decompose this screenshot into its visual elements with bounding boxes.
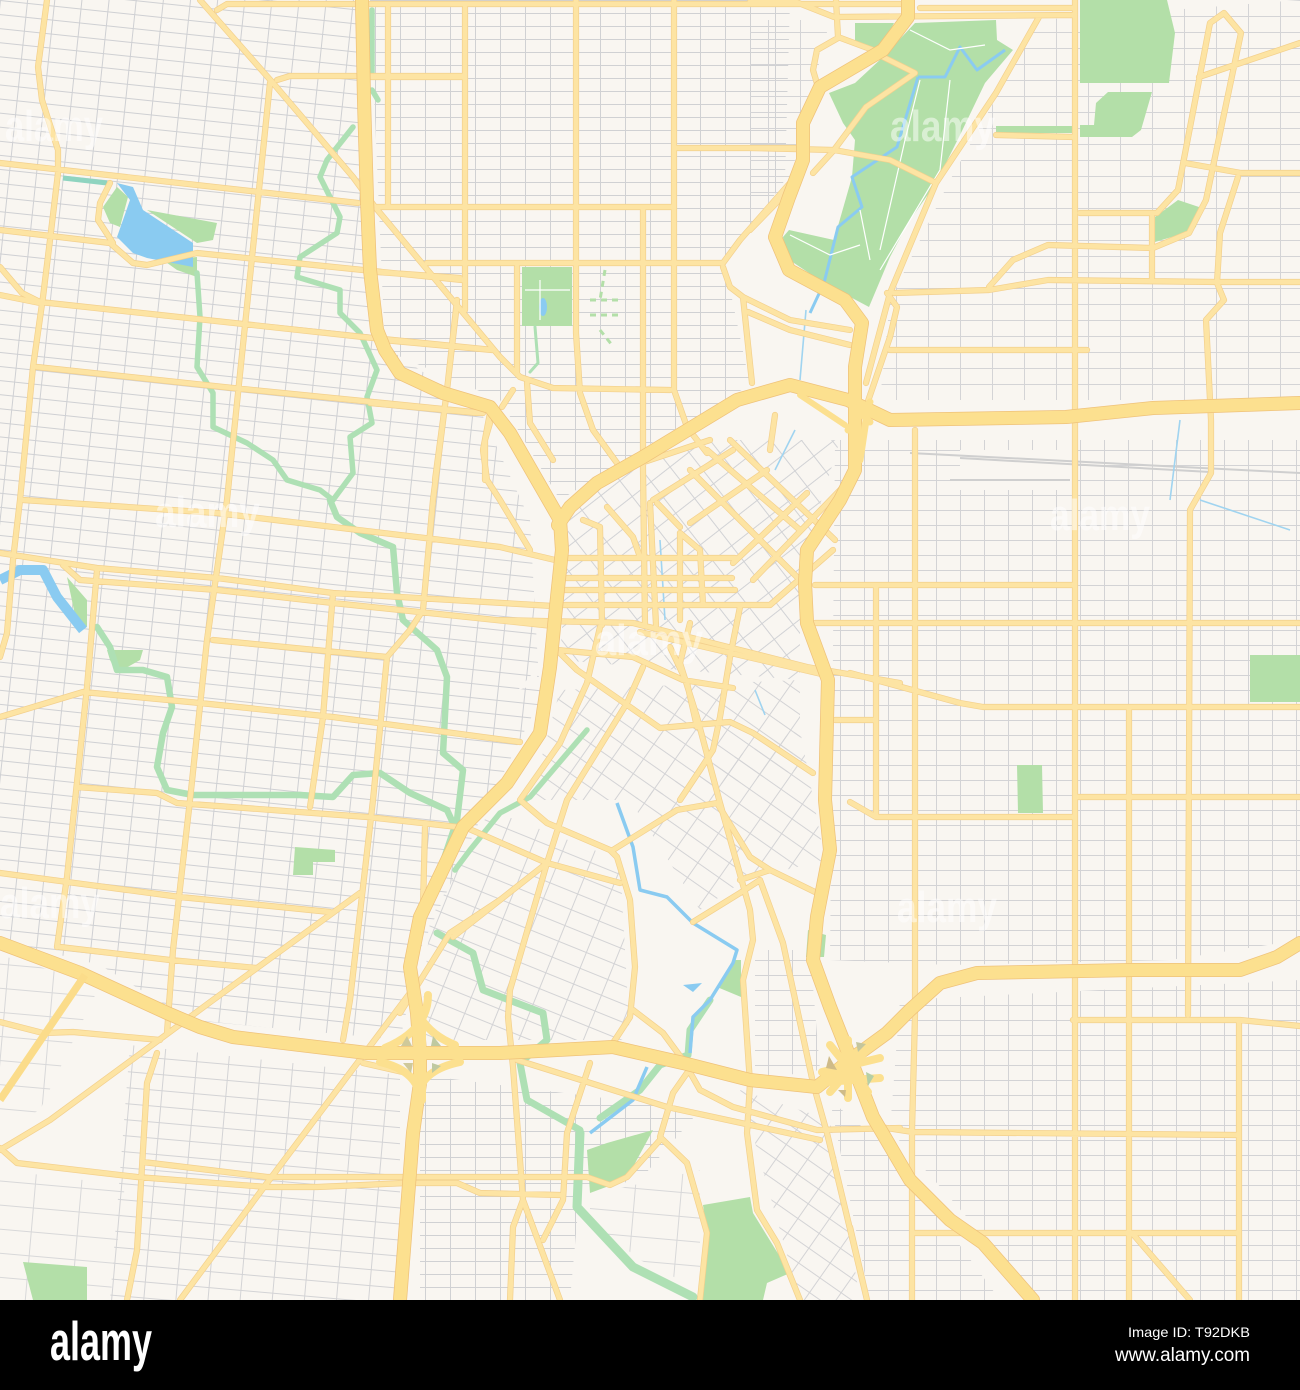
footer logo: alamy — [50, 1310, 152, 1372]
highway interchanges — [380, 395, 880, 1100]
watermarks — [0, 102, 1150, 932]
website: www.alamy.com — [1114, 1345, 1250, 1366]
branch highway southwest — [0, 975, 85, 1100]
watermarks: alamy — [5, 102, 103, 151]
watermarks: alamy — [155, 488, 260, 537]
image id: Image ID: T92DKB — [1128, 1324, 1250, 1340]
creeks and greenways — [97, 10, 710, 1297]
watermarks: alamy — [890, 102, 995, 151]
watermarks: alamy — [595, 616, 703, 665]
rivers and lake — [0, 47, 1290, 1133]
small green plots north of downtown — [590, 270, 620, 345]
park paths — [525, 30, 985, 320]
watermarks: alamy — [0, 879, 100, 928]
watermarks: alamy — [897, 883, 997, 932]
footer bar — [0, 1300, 1300, 1390]
watermarks: alamy — [1050, 491, 1150, 540]
